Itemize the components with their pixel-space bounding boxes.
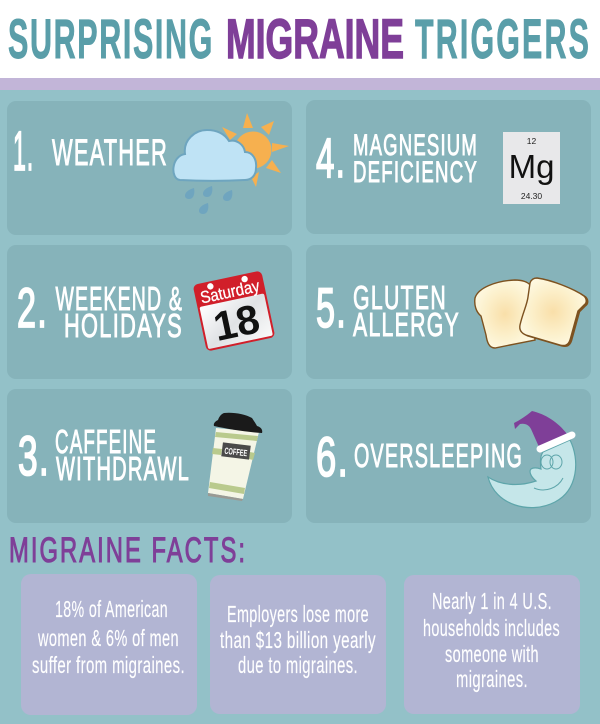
- icon: periodic table tile Mg: Mg: [509, 148, 554, 185]
- panel: magnesium deficiency: [306, 100, 591, 234]
- label: caffeine withdrawl: [55, 423, 190, 487]
- fact card: prevalence: women & 6% of men: [37, 625, 179, 651]
- fact card: employer cost: Employers lose more: [227, 601, 369, 627]
- icon: periodic table tile Mg: [503, 132, 560, 204]
- fact card: households: [404, 575, 580, 714]
- label: weekend and holidays: [56, 280, 183, 344]
- icon: coffee cup: [208, 413, 262, 501]
- icon: coffee cup: COFFEE: [224, 446, 248, 458]
- fact card: prevalence: [21, 574, 197, 715]
- title: [8, 7, 591, 70]
- panel: gluten allergy: [306, 245, 591, 379]
- label: magnesium deficiency: MAGNESIUM: [353, 129, 478, 162]
- icon: periodic table tile Mg: 24.30: [521, 191, 542, 201]
- label: weekend and holidays: HOLIDAYS: [64, 307, 183, 344]
- heading: migraine facts: MIGRAINE FACTS:: [9, 531, 247, 570]
- label: gluten allergy: [353, 279, 460, 343]
- number 6: 6.: [316, 425, 349, 488]
- icon: toast slices: [475, 278, 588, 348]
- label: caffeine withdrawl: CAFFEINE: [55, 423, 157, 460]
- number 2: 2.: [17, 276, 48, 339]
- icon: calendar: 18: [209, 295, 264, 350]
- lavender header band: [0, 78, 600, 90]
- panel: weather: [7, 101, 292, 235]
- label: gluten allergy: GLUTEN: [353, 279, 447, 316]
- icon: rain cloud: [173, 130, 256, 181]
- icon: rain drops: [185, 186, 232, 214]
- number 4: 4.: [316, 126, 346, 189]
- fact card: households: migraines.: [456, 666, 528, 692]
- panel: caffeine withdrawal: [7, 389, 292, 523]
- icon: sun behind cloud: [222, 113, 289, 187]
- fact card: employer cost: due to migraines.: [238, 652, 358, 678]
- title: MIGRAINE: [226, 7, 404, 70]
- number 3: 3.: [18, 424, 50, 487]
- fact card: employer cost: [210, 575, 386, 714]
- label: magnesium deficiency: DEFICIENCY: [353, 156, 478, 189]
- fact card: households: someone with: [445, 641, 539, 667]
- title: SURPRISING: [8, 7, 214, 70]
- panel: oversleeping: [306, 389, 591, 523]
- icon: periodic table tile Mg: 12: [527, 136, 536, 146]
- panel: weekend and holidays: [7, 245, 292, 379]
- label: gluten allergy: ALLERGY: [353, 306, 460, 343]
- icon: calendar: [193, 270, 276, 353]
- label: magnesium deficiency: [353, 129, 478, 189]
- label: weekend and holidays: WEEKEND &: [56, 280, 183, 317]
- icon: calendar: Saturday: [199, 276, 262, 307]
- icon: crescent moon with nightcap: [488, 411, 576, 508]
- label: caffeine withdrawl: WITHDRAWL: [56, 450, 190, 487]
- fact card: employer cost: than $13 billion yearly: [220, 627, 376, 653]
- label: weather: WEATHER: [52, 132, 168, 173]
- number 5: 5.: [316, 276, 347, 339]
- panel: weather: 1.: [13, 119, 34, 182]
- fact card: prevalence: suffer from migraines.: [32, 652, 185, 678]
- fact card: prevalence: 18% of American: [55, 596, 168, 622]
